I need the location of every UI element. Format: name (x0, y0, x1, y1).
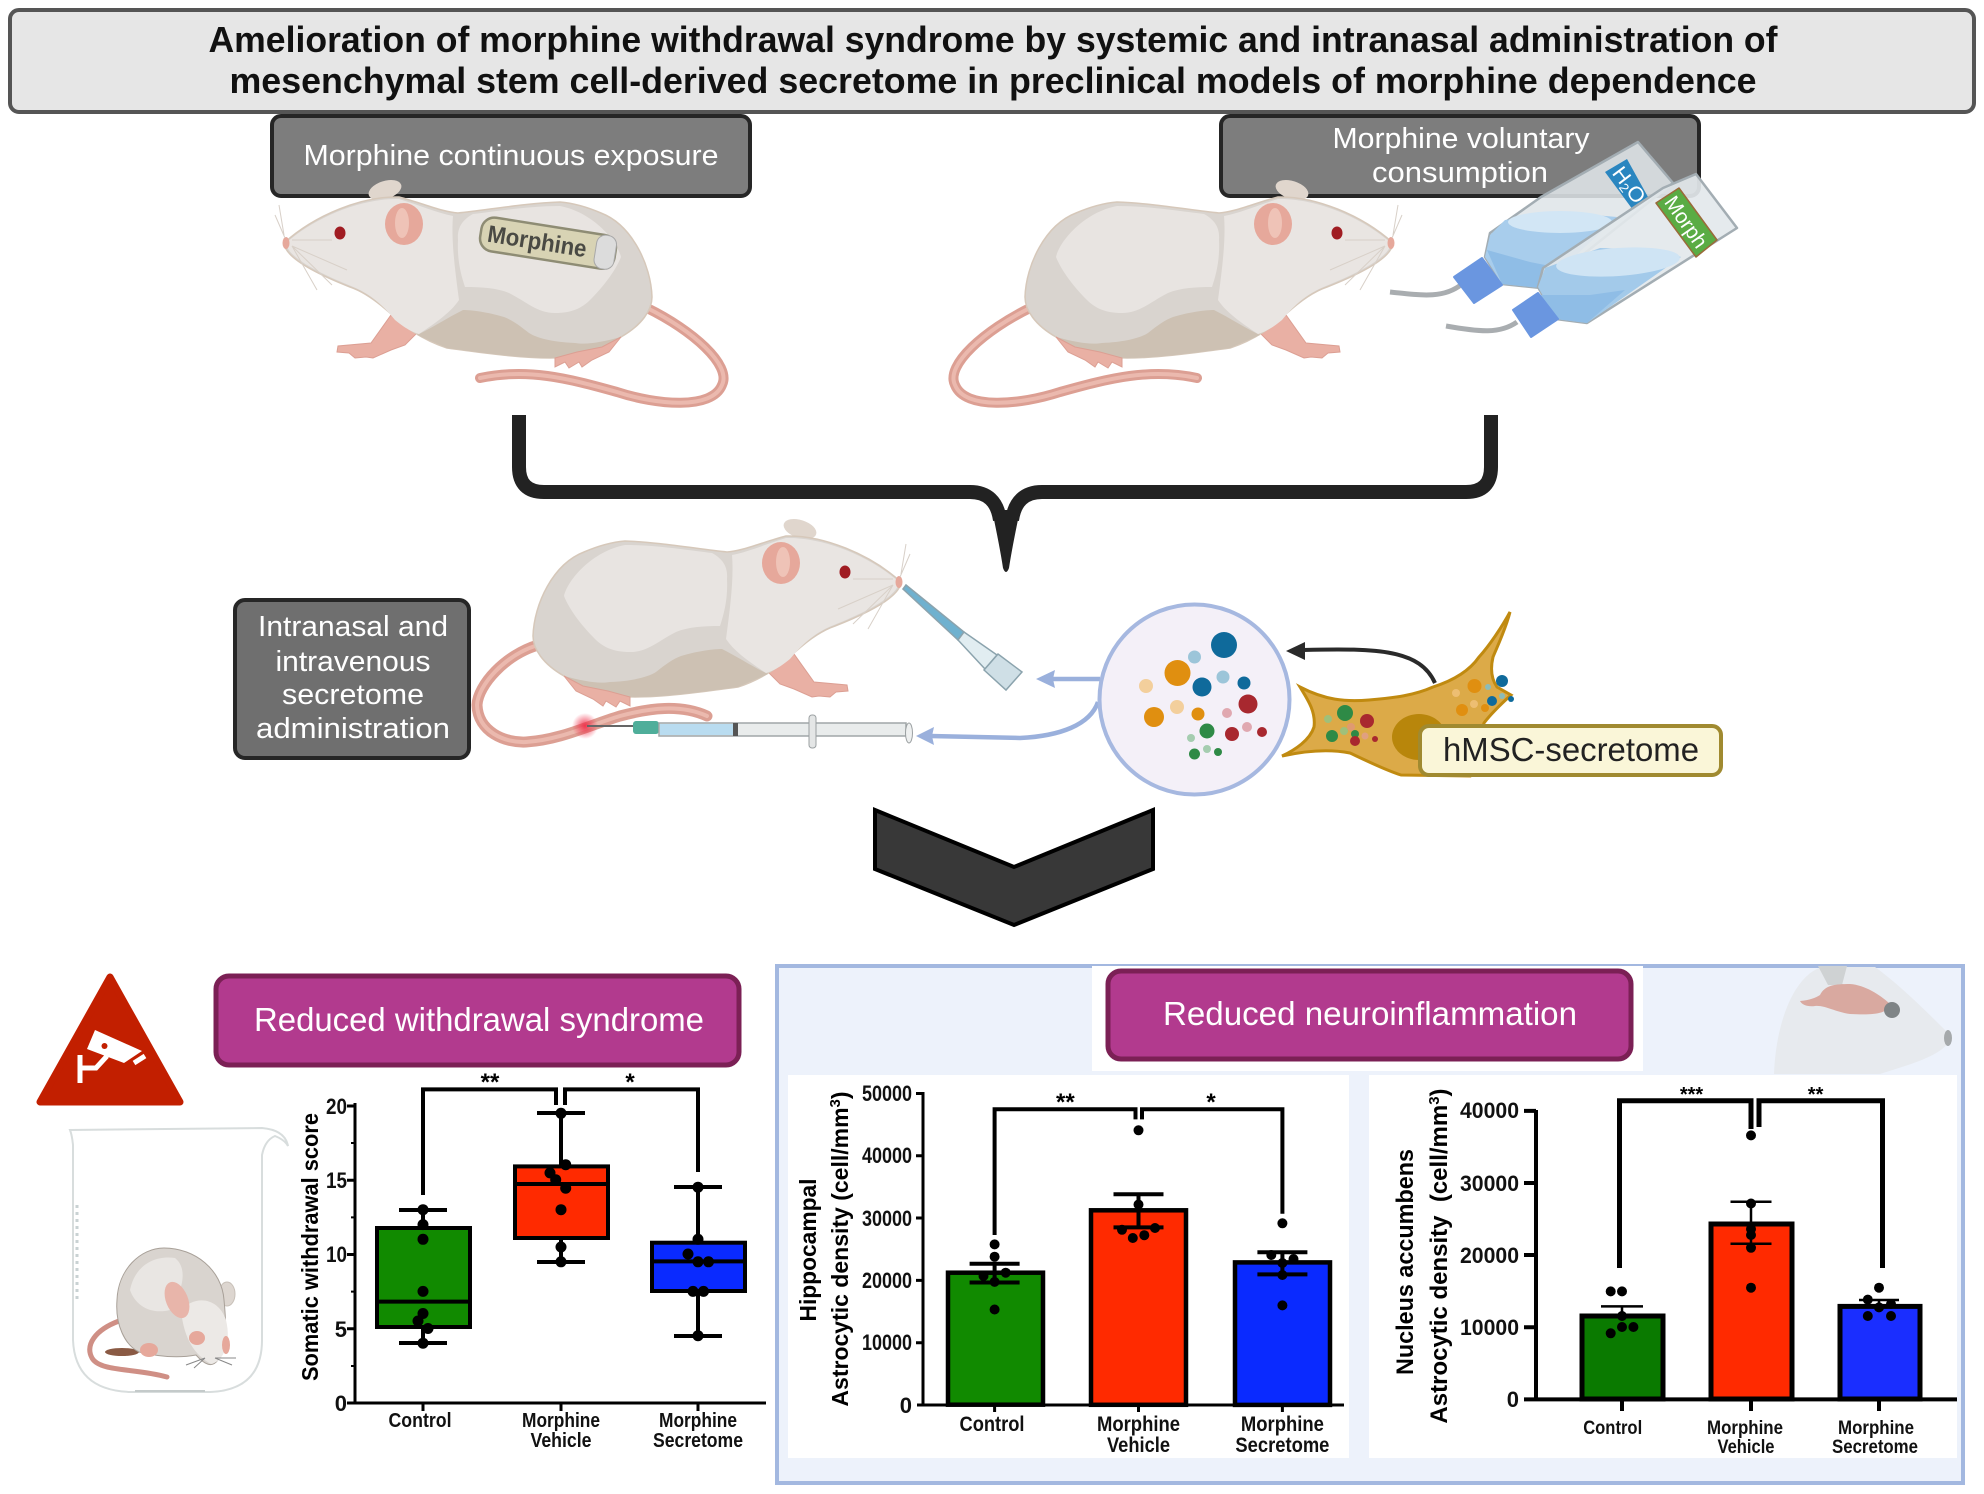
y axis numbers: 50000 (862, 1081, 912, 1106)
error bars (970, 1194, 1307, 1282)
y axis numbers: 20 (326, 1094, 347, 1119)
icon: syringe (587, 715, 912, 748)
significance bracket: ** (481, 1069, 500, 1096)
white backing behind banner (1092, 966, 1643, 1071)
category labels: Vehicle (530, 1430, 592, 1452)
significance bracket: * (625, 1069, 635, 1096)
significance bracket: ** (1808, 1084, 1824, 1106)
box: morphine vehicle (515, 1113, 608, 1262)
y axis numbers (326, 1094, 347, 1416)
arrow: secretome to intranasal route (1036, 670, 1100, 688)
label: intranasal and intravenous secretome administration: intravenous (276, 646, 430, 678)
label: morphine voluntary consumption (1221, 116, 1699, 196)
icon: mesenchymal stem cell (1282, 612, 1514, 776)
y axis titles: Nucleus accumbens (1392, 1149, 1419, 1375)
y axis numbers (862, 1081, 912, 1418)
y axis numbers: 0 (335, 1391, 347, 1416)
label: morphine voluntary consumption: Morphine voluntary (1332, 123, 1590, 155)
y axis titles: Astrocytic density (cell/mm (827, 1107, 853, 1407)
chart panel: hippocampal astrocytic density (788, 1075, 1349, 1458)
y axis numbers: 5 (335, 1317, 347, 1342)
title banner: Amelioration of morphine withdrawal syndrome by systemic and intranasal administration of (208, 19, 1778, 60)
icon: H2O bottle: O (1621, 181, 1650, 208)
icon: morphine implant capsule: Morphine (486, 221, 589, 263)
category labels: Morphine (522, 1410, 600, 1432)
banner: reduced withdrawal syndrome (216, 976, 739, 1065)
category labels: Morphine (659, 1410, 737, 1432)
error bars (1601, 1202, 1899, 1318)
significance bracket (423, 1069, 698, 1195)
y axis numbers: 10000 (1460, 1315, 1519, 1340)
label: morphine continuous exposure: Morphine continuous exposure (304, 140, 718, 172)
axes and ticks (1524, 1110, 1957, 1411)
y axis numbers: 20000 (862, 1268, 912, 1293)
bars (1582, 1224, 1920, 1399)
illustration: mouse voluntary consumption (953, 176, 1402, 403)
label: intranasal and intravenous secretome administration: administration (256, 713, 450, 745)
banner: reduced neuroinflammation: Reduced neuroinflammation (1163, 995, 1577, 1032)
chart panel: nucleus accumbens astrocytic density (1369, 1075, 1957, 1458)
y axis numbers: 0 (1507, 1387, 1519, 1412)
category labels: Control (1583, 1418, 1642, 1439)
label: intranasal and intravenous secretome administration (235, 600, 469, 758)
y axis numbers: 0 (900, 1393, 912, 1418)
illustration: mouse with morphine implant (275, 176, 724, 403)
panel: reduced neuroinflammation (777, 966, 1963, 1483)
category labels (1583, 1418, 1918, 1458)
arrow: cell releases secretome (1286, 642, 1435, 683)
icon: H2O bottle (1390, 142, 1673, 303)
icon: morphine implant capsule (478, 216, 618, 271)
category labels: Control (960, 1413, 1024, 1436)
banner: reduced withdrawal syndrome: Reduced withdrawal syndrome (254, 1001, 704, 1038)
icon: warning triangle with camera (40, 977, 180, 1102)
y axis titles: Hippocampal (795, 1178, 821, 1322)
title banner (10, 10, 1974, 112)
icon: morphine bottle: Morph (1660, 192, 1712, 253)
illustration: mouse in glass beaker (70, 1128, 288, 1392)
category labels (388, 1410, 743, 1452)
illustration: treated mouse (477, 515, 910, 742)
axes and ticks (916, 1092, 1344, 1412)
arrow: secretome to intravenous route (916, 702, 1098, 745)
category labels: Secretome (1832, 1437, 1918, 1458)
y axis numbers: 15 (326, 1168, 347, 1193)
box: control (377, 1210, 470, 1343)
y axis titles: 3 (1426, 1096, 1443, 1105)
y axis titles: Astrocytic density (cell/mm (1426, 1105, 1453, 1424)
bracket joining the two exposure models (519, 415, 1491, 572)
category labels: Morphine (1097, 1413, 1180, 1436)
category labels: Vehicle (1718, 1437, 1774, 1458)
banner: reduced neuroinflammation (1108, 971, 1631, 1059)
illustration: faded mouse head with brain (1774, 966, 1952, 1074)
label: intranasal and intravenous secretome administration: secretome (282, 679, 424, 711)
label: hMSC-secretome: hMSC-secretome (1443, 731, 1699, 768)
y axis titles: ) (827, 1091, 853, 1099)
significance bracket (1620, 1084, 1882, 1268)
category labels: Control (388, 1410, 452, 1432)
y axis titles: ) (1426, 1088, 1453, 1096)
category labels: Secretome (1235, 1434, 1329, 1457)
bars (948, 1210, 1330, 1405)
icon: pipette tip (903, 585, 1022, 690)
y axis numbers: 10 (326, 1242, 347, 1267)
label: intranasal and intravenous secretome administration: Intranasal and (258, 611, 448, 643)
data points (1606, 1130, 1896, 1338)
y axis numbers: 10000 (862, 1330, 912, 1355)
title banner: mesenchymal stem cell-derived secretome in preclinical models of morphine dependence (230, 60, 1756, 101)
y axis numbers (1460, 1098, 1519, 1412)
y axis titles: 3 (827, 1099, 844, 1107)
axes and ticks (347, 1103, 766, 1411)
box: morphine secretome (652, 1187, 745, 1336)
category labels (960, 1413, 1329, 1457)
y axis title: Somatic withdrawal score (297, 1113, 323, 1381)
category labels: Morphine (1707, 1418, 1783, 1439)
icon: beaker (70, 1128, 288, 1392)
significance bracket: ** (1056, 1089, 1075, 1116)
y axis numbers: 20000 (1460, 1243, 1519, 1268)
significance bracket (995, 1089, 1282, 1235)
arrow: large downward chevron (875, 810, 1153, 925)
y axis numbers: 40000 (1460, 1098, 1519, 1123)
category labels: Vehicle (1107, 1434, 1170, 1457)
chart: somatic withdrawal score box plot (297, 1069, 766, 1452)
significance bracket: * (1206, 1089, 1216, 1116)
y axis titles (795, 1091, 853, 1407)
data points (412, 1108, 714, 1349)
category labels: Morphine (1241, 1413, 1324, 1436)
icon: H2O bottle: H (1607, 162, 1635, 188)
icon: secretome vesicle circle (1100, 604, 1290, 794)
category labels: Morphine (1838, 1418, 1914, 1439)
illustration: water and morphine drinking bottles (1390, 142, 1737, 337)
y axis titles (1392, 1088, 1453, 1424)
icon: morphine bottle (1446, 174, 1737, 337)
significance bracket: *** (1680, 1084, 1703, 1106)
icon: injection site glow on tail (572, 713, 598, 739)
y axis numbers: 40000 (862, 1143, 912, 1168)
label: hMSC-secretome (1420, 726, 1721, 775)
label: morphine voluntary consumption: consumption (1372, 157, 1548, 189)
category labels: Secretome (653, 1430, 743, 1452)
y axis numbers: 30000 (1460, 1171, 1519, 1196)
label: morphine continuous exposure (272, 116, 750, 196)
data points (978, 1125, 1298, 1314)
icon: H2O bottle: 2 (1616, 180, 1632, 195)
y axis numbers: 30000 (862, 1206, 912, 1231)
